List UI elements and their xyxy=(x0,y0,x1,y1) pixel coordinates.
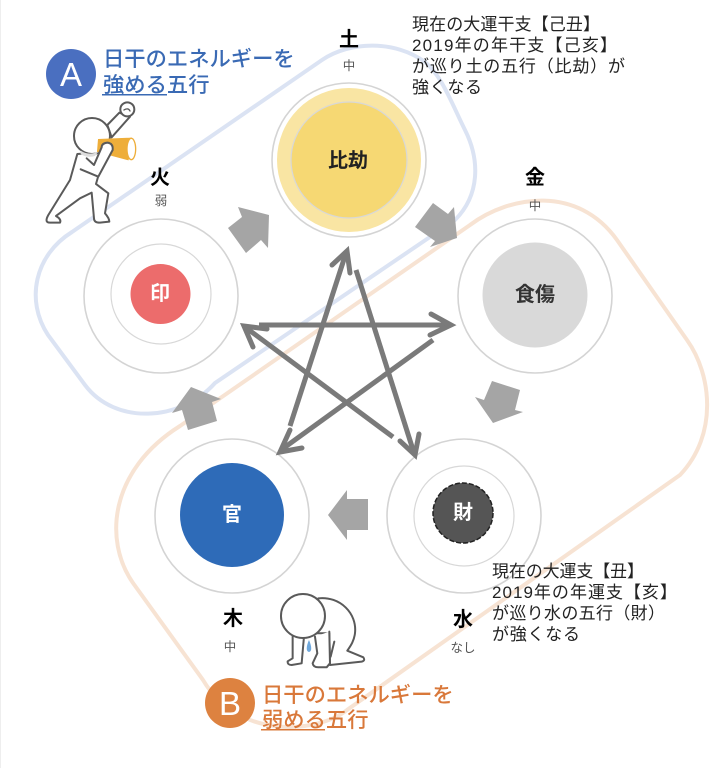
arrow: earth to metal xyxy=(415,203,457,247)
label: water xyxy=(450,608,476,655)
heading B xyxy=(261,683,454,732)
element node: metal xyxy=(458,219,612,373)
label: fire: 火 xyxy=(150,167,170,189)
label: wood: 木 xyxy=(223,607,243,630)
callout: earth note: 現在の大運干支【己丑】 xyxy=(412,15,600,34)
element node: water: 財 xyxy=(453,501,473,524)
element node: wood xyxy=(155,439,309,593)
callout: water note: が巡り水の五行（財） xyxy=(492,604,665,623)
element node: fire: 印 xyxy=(150,282,170,305)
badge A xyxy=(46,49,96,99)
label: fire: 弱 xyxy=(155,194,167,208)
heading B: 日干のエネルギーを xyxy=(262,683,454,707)
loop A: strengthening group outline xyxy=(36,46,475,414)
loop B: weakening group outline xyxy=(116,201,707,727)
label: metal: 金 xyxy=(525,166,545,189)
arrow: fire to earth xyxy=(228,207,269,253)
arrow: metal to water xyxy=(475,381,523,423)
callout: water note: 2019年の年運支【亥】 xyxy=(492,583,677,602)
badge A: A xyxy=(60,56,82,93)
label: wood: 中 xyxy=(224,639,236,654)
heading A: 日干のエネルギーを xyxy=(103,47,295,71)
element node: water xyxy=(387,439,541,593)
callout: earth note xyxy=(412,15,625,97)
arrow: water to wood xyxy=(328,490,368,540)
callout: water note: が強くなる xyxy=(492,625,580,644)
heading A: 強める五行 xyxy=(103,73,210,97)
heading A xyxy=(102,47,295,97)
badge B xyxy=(205,678,255,728)
label: water: 水 xyxy=(453,608,473,631)
label: earth: 中 xyxy=(343,58,355,73)
label: earth: 土 xyxy=(339,28,359,51)
icon: person with megaphone xyxy=(47,102,136,223)
element node: fire xyxy=(84,219,238,373)
star arrows: control cycle xyxy=(244,251,451,455)
callout: earth note: が巡り土の五行（比劫）が xyxy=(412,57,625,76)
callout: earth note: 強くなる xyxy=(412,78,482,97)
label: metal xyxy=(525,166,545,213)
element node: metal: 食傷 xyxy=(515,283,555,306)
element node: wood: 官 xyxy=(222,503,242,526)
label: fire xyxy=(150,167,170,208)
callout: water note: 現在の大運支【丑】 xyxy=(492,562,644,581)
icon: crying person on hands and knees xyxy=(281,594,364,667)
element node: earth xyxy=(272,83,426,237)
label: metal: 中 xyxy=(529,198,541,213)
heading B: 弱める五行 xyxy=(262,708,368,732)
label: earth xyxy=(339,28,359,73)
callout: earth note: 2019年の年干支【己亥】 xyxy=(412,36,617,55)
callout: water note xyxy=(492,562,677,644)
element node: earth: 比劫 xyxy=(328,149,368,172)
arrow: wood to fire xyxy=(172,387,221,430)
badge B: B xyxy=(219,685,241,722)
label: water: なし xyxy=(450,641,476,655)
label: wood xyxy=(223,607,243,654)
